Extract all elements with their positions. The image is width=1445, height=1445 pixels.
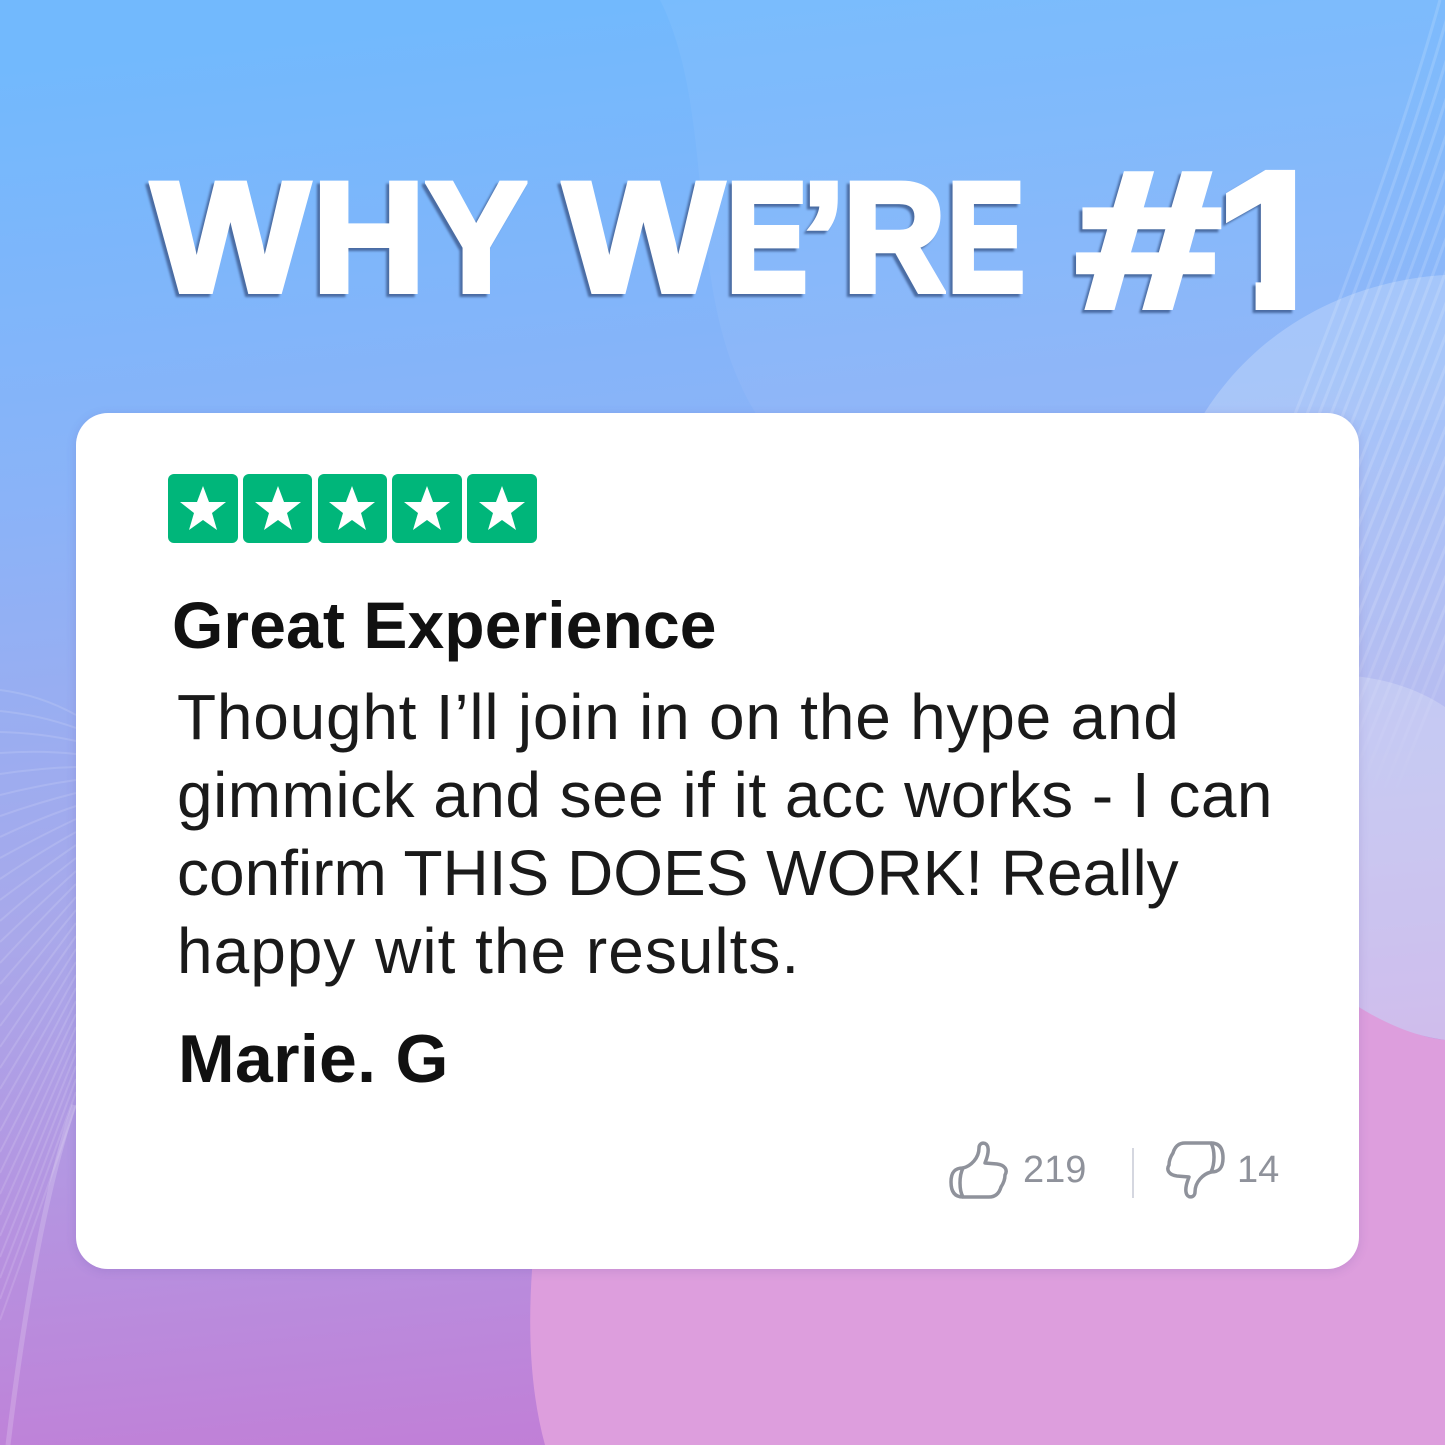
divider: [1132, 1148, 1134, 1198]
title: ’: [802, 151, 845, 325]
icon: thumbs up: [949, 1141, 1008, 1199]
review body: Thought I’ll join in on the hype and: [177, 681, 1180, 753]
reviewer name: Marie. G: [178, 1021, 449, 1097]
title: H: [312, 151, 425, 325]
title: #: [1077, 132, 1220, 346]
title: E: [726, 151, 808, 325]
review body: gimmick and see if it acc works - I can: [177, 759, 1273, 831]
title: R: [843, 151, 946, 325]
icon: five star rating: [168, 474, 537, 543]
review body: happy wit the results.: [177, 915, 800, 987]
panel: review card: [76, 413, 1359, 1269]
title: 1: [1216, 132, 1333, 346]
title: W: [564, 151, 723, 325]
title: E: [946, 151, 1025, 325]
title: [144, 132, 1296, 346]
likes count: 219: [1023, 1149, 1086, 1191]
icon: thumbs down: [1166, 1141, 1225, 1199]
dislikes count: 14: [1237, 1149, 1279, 1191]
title: W: [152, 151, 308, 325]
review heading: Great Experience: [172, 588, 717, 662]
review body: [177, 681, 1273, 987]
review body: confirm THIS DOES WORK! Really: [177, 837, 1179, 909]
title: Y: [426, 151, 526, 325]
